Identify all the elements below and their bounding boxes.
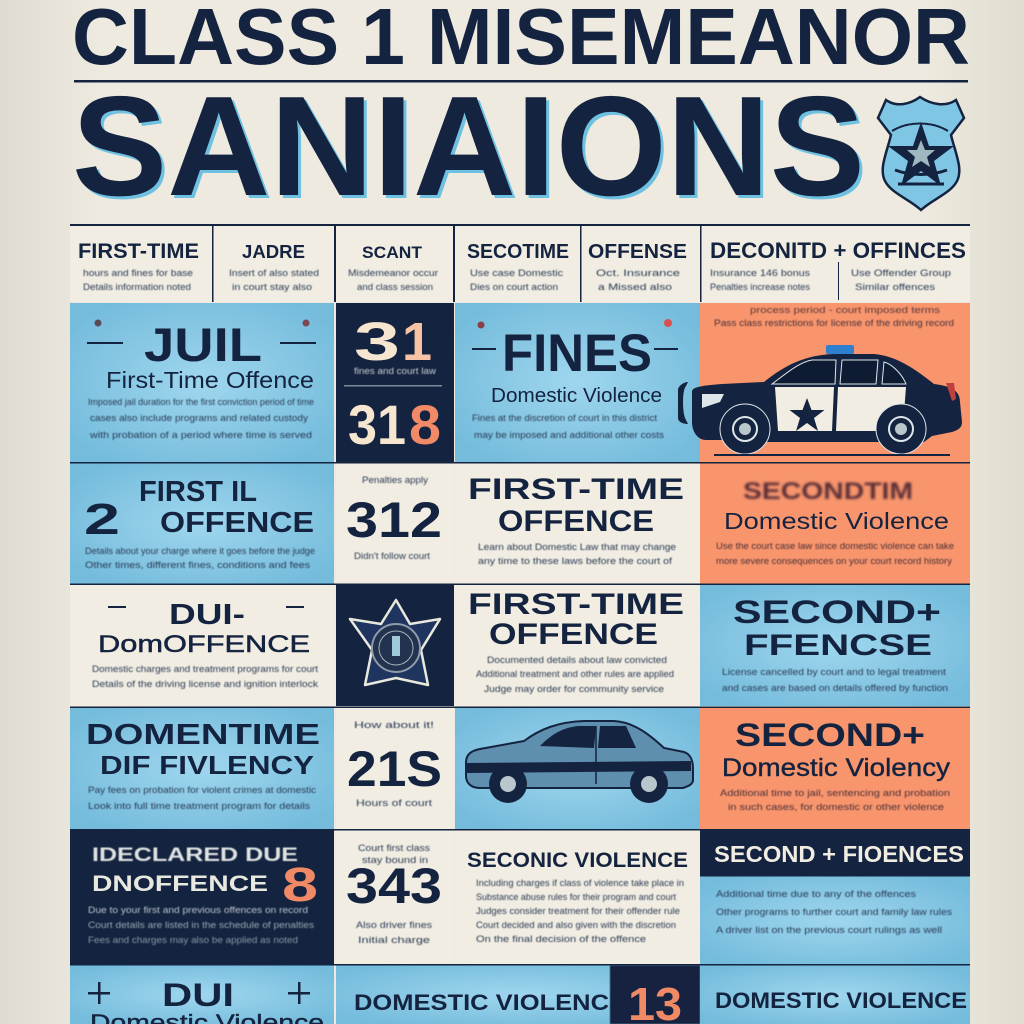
panel: second-time domestic violence: more severe consequences on your court record history: [716, 556, 953, 566]
panel: fines domestic violence: Domestic Violence: [491, 385, 662, 407]
panel: header row: and class session: [357, 282, 433, 292]
panel: second+ offence: SECOND+: [733, 594, 941, 630]
panel: jail first-time offence: Imposed jail duration for the first conviction period of time: [88, 397, 314, 407]
panel: header row: hours and fines for base: [83, 268, 193, 278]
icon: side-view car: [466, 721, 693, 803]
panel: second-time domestic violence: Domestic Violence: [724, 508, 949, 534]
panel: domestic violence 13: DOMESTIC VIOLENCE: [354, 990, 626, 1015]
panel: 343 stat: Also driver fines: [356, 920, 433, 930]
panel: header row: Use case Domestic: [470, 268, 564, 278]
panel: domestic fivlency: Look into full time treatment program for details: [88, 801, 311, 811]
panel: dui domestic violence bottom: [70, 966, 334, 1024]
panel: header row: OFFENSE: [588, 241, 687, 263]
panel: 343 stat: [336, 830, 454, 964]
panel: header row: [70, 226, 970, 302]
panel: first offence 2: Other times, different fines, conditions and fees: [85, 560, 311, 570]
panel: first offence 2: Details about your charge where it goes before the judge: [85, 546, 315, 556]
panel: dark offence 8: Due to your first and previous offences on record: [88, 905, 308, 915]
panel: car illustration: [455, 708, 700, 829]
panel: first-time offence: [455, 464, 700, 584]
panel: first offence 2: FIRST IL: [139, 476, 257, 508]
panel: second+ domestic violency: in such cases, for domestic or other violence: [728, 802, 944, 812]
panel: jail numbers: 3: [354, 312, 400, 372]
panel: 343 stat: 343: [346, 858, 442, 914]
panel: fines domestic violence: FINES: [502, 324, 652, 383]
panel: jail first-time offence: [70, 303, 334, 462]
panel: header row: Similar offences: [855, 282, 936, 292]
panel: fines domestic violence: may be imposed and additional other costs: [474, 430, 665, 440]
panel: second domestic violence: SECONIC VIOLENCE: [467, 849, 688, 872]
panel: dark offence 8: [70, 830, 334, 964]
panel: 312 stat: 312: [346, 492, 442, 548]
panel: header row: Oct. Insurance: [596, 268, 680, 278]
panel: second+ offence: FFENCSE: [744, 629, 932, 662]
panel: header row: Penalties increase notes: [710, 282, 811, 292]
panel: second+ domestic violency: Domestic Violency: [722, 754, 951, 782]
panel: second-time domestic violence: [700, 464, 970, 584]
panel: 312 stat: [336, 464, 454, 584]
panel: header row: SCANT: [362, 243, 423, 262]
panel: domestic fivlency: DOMENTIME: [86, 719, 320, 751]
panel: header row: a Missed also: [598, 282, 672, 292]
panel: header row: Dies on court action: [470, 282, 558, 292]
panel: dark offence 8: Fees and charges may also be applied as noted: [88, 935, 298, 945]
panel: first-time offence: FIRST-TIME: [468, 473, 684, 506]
panel: first-time offence 2: [455, 585, 700, 706]
panel: jail first-time offence: with probation of a period where time is served: [89, 430, 312, 440]
heading rule: [74, 80, 968, 82]
panel: dark offence 8: 8: [282, 859, 318, 912]
subtitle: sanctions: SANIAIONS: [75, 70, 868, 229]
panel: second+ domestic violency: SECOND+: [735, 717, 925, 753]
panel: second+ offence: [700, 585, 970, 706]
panel: second+ fiences: A driver list on the previous court rulings as well: [716, 925, 942, 935]
panel: first-time offence 2: Judge may order for community service: [484, 684, 664, 694]
panel: header row: Use Offender Group: [851, 268, 951, 278]
panel: first offence 2: OFFENCE: [160, 507, 314, 539]
panel: second domestic violence: Court decided and also given with the discretion: [476, 920, 676, 930]
panel: 312 stat: Didn't follow court: [354, 551, 431, 561]
panel: second+ fiences: Additional time due to any of the offences: [716, 889, 917, 899]
panel: first-time offence: Learn about Domestic Law that may change: [478, 542, 676, 552]
panel: second domestic violence: Judges consider treatment for their offender rule: [476, 906, 680, 916]
panel: 21s stat: 21S: [347, 741, 442, 797]
panel: header row: DECONITD + OFFINCES: [710, 238, 966, 263]
panel: jail numbers: 31: [348, 393, 406, 456]
panel: second-time domestic violence: SECONDTIM: [743, 478, 913, 505]
panel: 21s stat: Hours of court: [356, 798, 433, 808]
panel: domestic violence right: [700, 966, 970, 1024]
panel: dui domestic offence: [70, 585, 334, 706]
panel: jail numbers: fines and court law: [354, 366, 437, 376]
panel: header row: SECOTIME: [467, 241, 569, 263]
icon: police car: [678, 345, 962, 456]
panel: sheriff star: [336, 585, 454, 706]
panel: header row: Misdemeanor occur: [348, 268, 438, 278]
panel: second+ domestic violency: Additional time to jail, sentencing and probation: [720, 788, 950, 798]
panel: first-time offence 2: Additional treatment and other rules are applied: [476, 669, 674, 679]
panel: second domestic violence: On the final decision of the offence: [476, 934, 646, 944]
panel: second+ fiences: [700, 830, 970, 964]
panel: jail first-time offence: cases also include programs and related custody: [90, 413, 309, 423]
panel: first offence 2: [70, 464, 334, 584]
panel: header row: Insert of also stated: [229, 268, 319, 278]
panel: header row: Insurance 146 bonus: [710, 268, 811, 278]
panel: 312 stat: Penalties apply: [362, 475, 429, 485]
panel: second domestic violence: [455, 830, 700, 964]
panel: second+ offence: and cases are based on details offered by function: [722, 683, 948, 693]
panel: first-time offence 2: FIRST-TIME: [468, 588, 684, 621]
panel: 21s stat: How about it!: [354, 720, 434, 730]
panel: dark offence 8: IDECLARED DUE: [92, 845, 298, 866]
panel: domestic violence right: DOMESTIC VIOLENCE: [715, 988, 967, 1013]
panel: header row: JADRE: [242, 242, 305, 262]
panel: jail numbers: 8: [409, 393, 441, 456]
panel: 343 stat: Court first class: [358, 843, 431, 853]
panel: second domestic violence: Substance abuse rules for their program and court: [476, 892, 676, 902]
panel: jail numbers: [336, 303, 454, 462]
panel: first offence 2: 2: [84, 495, 120, 544]
panel: domestic fivlency: DIF FIVLENCY: [100, 750, 314, 780]
panel: second+ fiences: Other programs to further court and family law rules: [716, 907, 953, 917]
panel: second+ fiences: SECOND + FIOENCES: [714, 841, 964, 867]
panel: dui domestic offence: DomOFFENCE: [98, 631, 310, 658]
panel: dark offence 8: Court details are listed in the schedule of penalties: [88, 920, 315, 930]
panel: 343 stat: stay bound in: [362, 855, 428, 865]
panel: first-time offence: any time to these laws before the court of: [478, 556, 673, 566]
subtitle: sanctions: SANIAIONS: [72, 67, 865, 226]
icon: police badge: [878, 97, 964, 210]
panel: domestic violence 13: [336, 966, 700, 1024]
panel: 21s stat: [336, 708, 454, 829]
icon: sheriff star badge: [350, 600, 440, 685]
panel: second+ domestic violency: [700, 708, 970, 829]
panel: jail first-time offence: JUIL: [144, 318, 262, 371]
panel: police car: process period - court imposed terms: [750, 305, 941, 315]
panel: first-time offence 2: OFFENCE: [489, 618, 658, 651]
panel: dui domestic violence bottom: DUI: [162, 977, 234, 1013]
panel: header row: Details information noted: [83, 282, 191, 292]
grid top rule: [70, 224, 970, 226]
panel: header row: in court stay also: [232, 282, 312, 292]
panel: second+ offence: License cancelled by court and to legal treatment: [722, 667, 947, 677]
panel: domestic fivlency: Pay fees on probation for violent crimes at domestic: [88, 785, 317, 795]
panel: domestic fivlency: [70, 708, 334, 829]
panel: dui domestic offence: Domestic charges and treatment programs for court: [92, 664, 319, 674]
panel: fines domestic violence: [455, 303, 700, 462]
panel: dark offence 8: DNOFFENCE: [92, 871, 268, 896]
panel: fines domestic violence: Fines at the discretion of court in this district: [472, 413, 658, 423]
panel: jail first-time offence: First-Time Offence: [106, 367, 314, 393]
panel: second domestic violence: Including charges if class of violence take place in: [476, 878, 684, 888]
panel: jail numbers: 1: [402, 312, 432, 372]
panel: first-time offence 2: Documented details about law convicted: [487, 655, 667, 665]
panel: dui domestic offence: DUI-: [169, 599, 245, 631]
panel: first-time offence: OFFENCE: [498, 505, 654, 538]
panel: police car: Pass class restrictions for license of the driving record: [714, 318, 954, 328]
panel: dui domestic offence: Details of the driving license and ignition interlock: [92, 679, 319, 689]
panel: 343 stat: Initial charge: [358, 935, 430, 945]
panel: police car: [678, 303, 970, 462]
panel: header row: FIRST-TIME: [78, 240, 199, 263]
panel: second-time domestic violence: Use the court case law since domestic violence can take: [716, 541, 954, 551]
